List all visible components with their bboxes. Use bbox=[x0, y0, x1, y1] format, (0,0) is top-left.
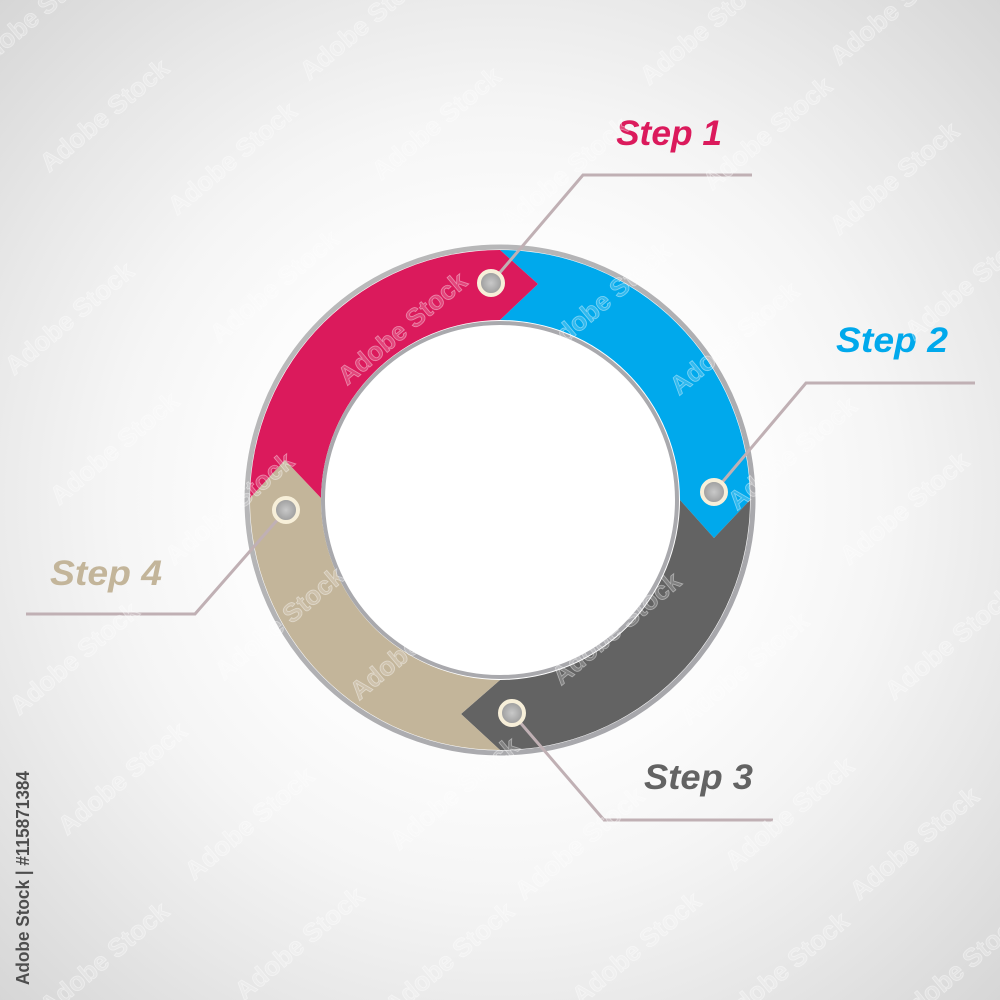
watermarks: Adobe Stock bbox=[332, 265, 473, 391]
marker: step 4 bbox=[274, 498, 298, 522]
watermarks: Adobe Stock bbox=[536, 235, 677, 361]
watermarks: Adobe Stock bbox=[159, 445, 300, 571]
watermarks: Adobe Stock bbox=[0, 255, 140, 381]
label: step 4: Step 4 bbox=[50, 554, 162, 593]
watermarks: Adobe Stock bbox=[834, 445, 975, 571]
watermarks: Adobe Stock bbox=[384, 730, 525, 856]
leader line: step 3 bbox=[512, 713, 773, 820]
cycle ring bbox=[250, 250, 750, 750]
watermarks: Adobe Stock bbox=[162, 95, 303, 221]
donut inner hole bbox=[323, 323, 677, 677]
label: step 1: Step 1 bbox=[616, 114, 722, 153]
segment: step 4 tan arrow bbox=[250, 460, 500, 750]
watermarks: Adobe Stock bbox=[509, 780, 650, 906]
watermarks: Adobe Stock bbox=[204, 223, 345, 349]
watermarks: Adobe Stock bbox=[719, 750, 860, 876]
watermarks: Adobe Stock bbox=[4, 595, 145, 721]
watermarks: Adobe Stock bbox=[52, 715, 193, 841]
leader line: step 2 bbox=[714, 383, 975, 492]
marker: step 2 bbox=[702, 480, 726, 504]
label: step 3: Step 3 bbox=[644, 758, 754, 797]
segment: step 1 red arrow bbox=[250, 250, 538, 498]
stock id vertical text: Adobe Stock | #115871384 bbox=[13, 771, 33, 985]
watermarks: Adobe Stock bbox=[844, 780, 985, 906]
leader line: step 4 bbox=[26, 510, 286, 614]
donut outer rim bbox=[247, 247, 753, 753]
watermarks: Adobe Stock bbox=[664, 275, 805, 401]
segment: step 3 dark arrow bbox=[461, 500, 750, 750]
watermarks: Adobe Stock bbox=[494, 110, 635, 236]
watermarks: Adobe Stock bbox=[209, 560, 350, 686]
watermarks: Adobe Stock bbox=[722, 390, 863, 516]
watermarks: Adobe Stock bbox=[44, 385, 185, 511]
watermarks: Adobe Stock bbox=[674, 605, 815, 731]
watermarks: Adobe Stock bbox=[344, 580, 485, 706]
watermarks: Adobe Stock bbox=[697, 70, 838, 196]
leader line: step 1 bbox=[491, 175, 752, 283]
watermarks: Adobe Stock bbox=[502, 435, 643, 561]
watermarks: Adobe Stock bbox=[366, 60, 507, 186]
watermarks: Adobe Stock bbox=[179, 760, 320, 886]
watermarks: Adobe Stock bbox=[824, 115, 965, 241]
watermarks: Adobe Stock bbox=[546, 565, 687, 691]
segment: step 2 blue arrow bbox=[500, 250, 750, 538]
marker: step 1 bbox=[479, 271, 503, 295]
watermarks: Adobe Stock bbox=[34, 52, 175, 178]
marker: step 3 bbox=[500, 701, 524, 725]
label: step 2: Step 2 bbox=[836, 321, 949, 360]
watermarks: Adobe Stock bbox=[372, 395, 513, 521]
